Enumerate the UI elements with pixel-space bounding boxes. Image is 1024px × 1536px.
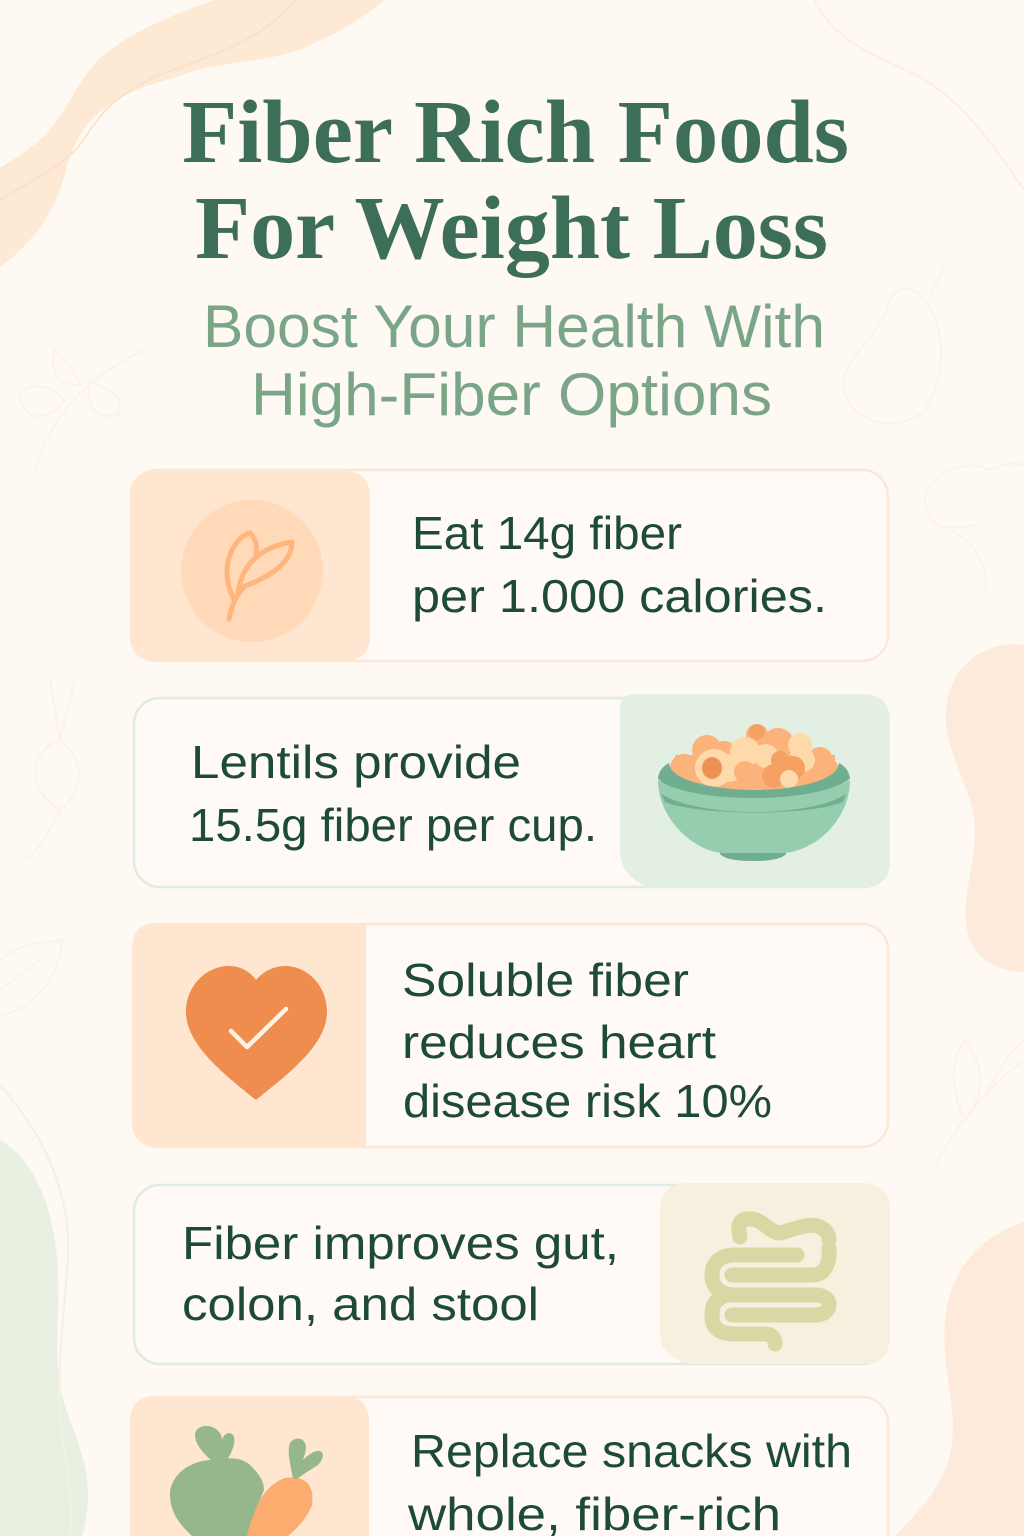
panel: replace snacks	[130, 1396, 888, 1536]
background doodle: broccoli	[925, 464, 1024, 590]
card text	[407, 1425, 852, 1536]
subtitle: High-Fiber Options	[251, 361, 772, 428]
background line: bottom left curve	[0, 1085, 71, 1536]
card text	[189, 736, 597, 851]
card text: Replace snacks with	[411, 1425, 852, 1477]
card text: Eat 14g fiber	[412, 507, 682, 559]
background blob: top left peach wave	[0, 0, 385, 267]
card text	[412, 507, 827, 622]
panel: lentils	[134, 694, 890, 888]
card text	[402, 954, 772, 1127]
background blob: right peach	[946, 644, 1024, 972]
background doodle: leaf sprig	[18, 348, 148, 470]
card text: disease risk 10%	[403, 1075, 772, 1127]
background line: inside top left wave	[0, 0, 295, 200]
card text: Lentils provide	[191, 736, 521, 788]
title	[182, 83, 849, 278]
card text: colon, and stool	[182, 1278, 539, 1330]
card text: reduces heart	[402, 1016, 716, 1068]
carrot	[245, 1477, 313, 1536]
icon panel: heart with check	[132, 923, 366, 1147]
bowl	[658, 763, 850, 861]
background doodle: beet	[25, 680, 79, 860]
subtitle: Boost Your Health With	[203, 293, 825, 360]
icon panel: leaf	[130, 471, 370, 661]
beet leaves	[195, 1426, 234, 1462]
card text: 15.5g fiber per cup.	[189, 799, 597, 851]
carrot leaves	[289, 1438, 323, 1479]
subtitle	[203, 293, 825, 428]
background doodle: right sprig	[935, 1040, 1024, 1165]
title: Fiber Rich Foods	[182, 83, 849, 182]
card text	[182, 1217, 619, 1330]
card text: Fiber improves gut,	[182, 1217, 619, 1269]
background line: top right curve	[815, 0, 1024, 190]
beet	[170, 1458, 264, 1536]
background blob: bottom left green	[0, 1140, 88, 1536]
icon panel: vegetables	[130, 1396, 369, 1536]
icon panel: intestine	[660, 1183, 890, 1364]
card text: Soluble fiber	[402, 954, 689, 1006]
background doodle: small leaf	[0, 940, 62, 1015]
panel: soluble fiber	[132, 923, 888, 1147]
icon panel: bowl of lentils	[620, 694, 890, 888]
background blob: bottom right peach	[895, 1222, 1024, 1536]
lentils	[670, 724, 839, 790]
panel: gut health	[134, 1183, 890, 1364]
title: For Weight Loss	[195, 179, 828, 278]
card text: per 1.000 calories.	[412, 570, 827, 622]
panel: eat 14g fiber	[130, 470, 888, 661]
background doodle: pear	[844, 265, 945, 424]
